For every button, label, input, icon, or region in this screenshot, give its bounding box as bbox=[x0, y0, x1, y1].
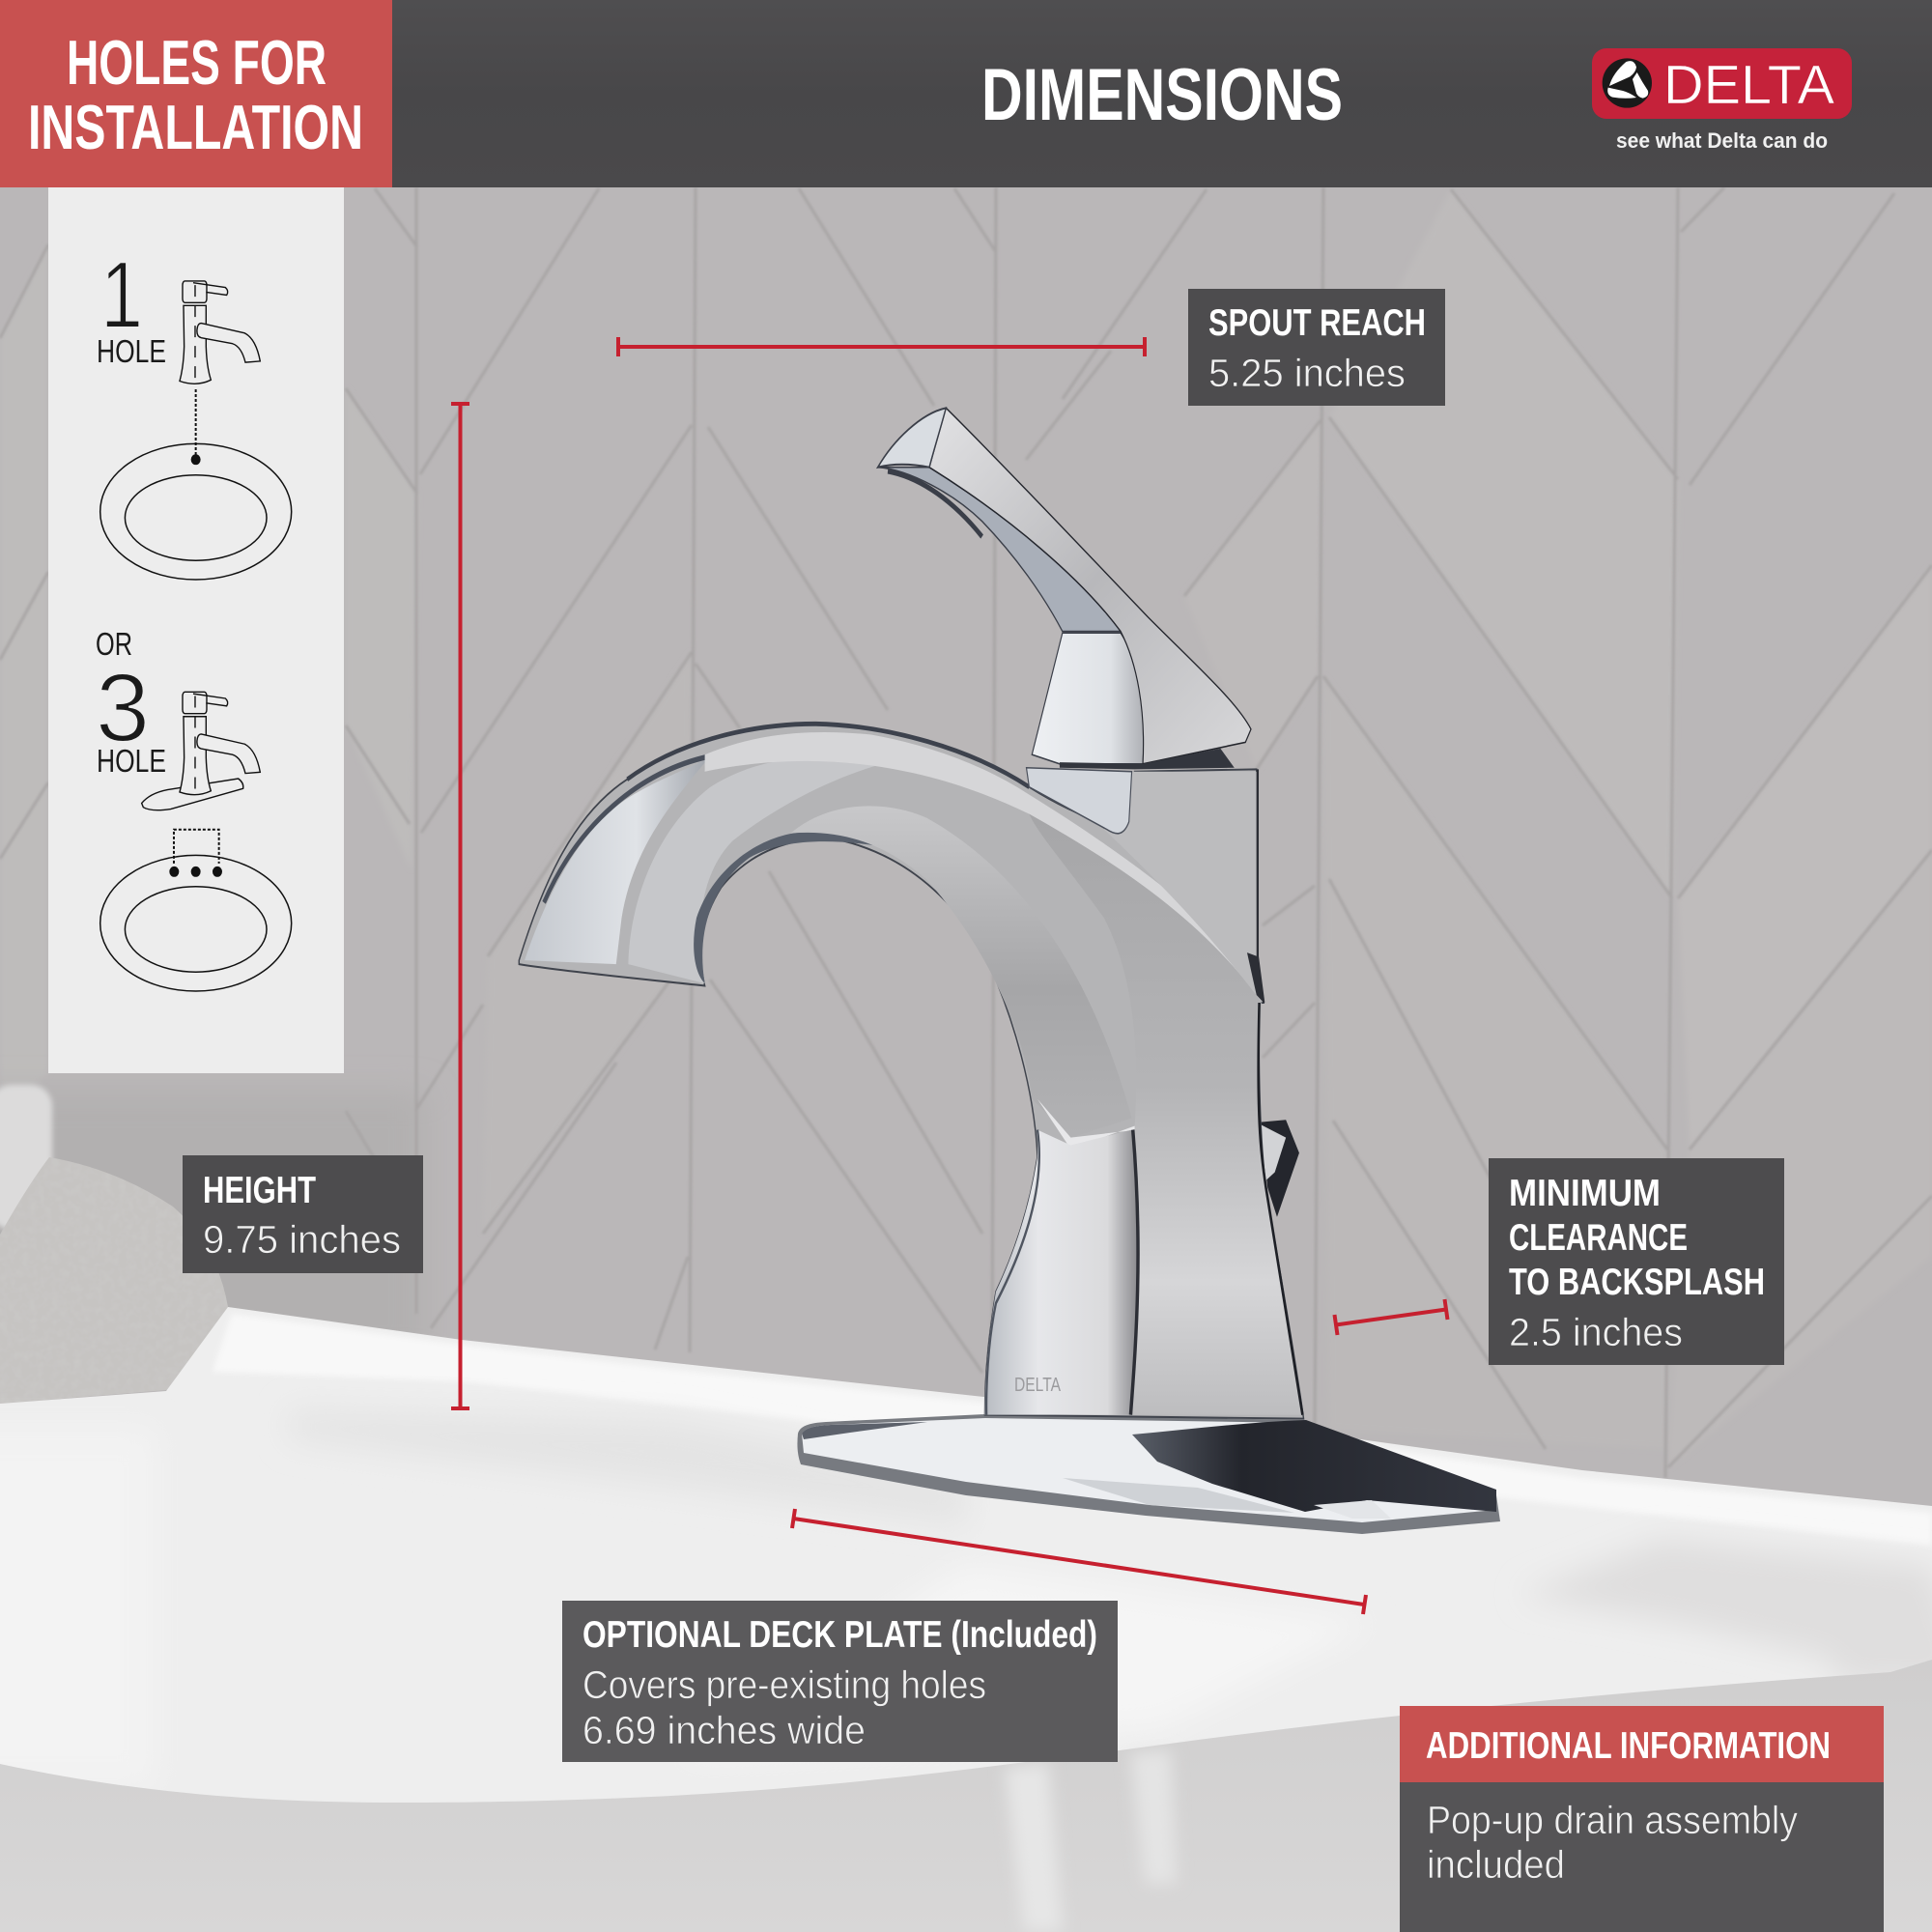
callout: additional information bbox=[1400, 1706, 1884, 1932]
icon: three hole sink bbox=[100, 855, 292, 991]
spout top highlight bbox=[705, 732, 1257, 995]
handle bbox=[878, 408, 1251, 769]
label: 1 hole bbox=[97, 242, 166, 369]
callout: additional information: ADDITIONAL INFORMATION bbox=[1426, 1725, 1831, 1767]
deck plate bbox=[797, 1414, 1500, 1534]
label: or 3 hole bbox=[96, 626, 166, 779]
callout: minimum clearance: 2.5 inches bbox=[1509, 1310, 1683, 1354]
pop-up rod bbox=[1261, 1120, 1299, 1217]
faucet bbox=[519, 408, 1500, 1534]
icon: three hole faucet with plate bbox=[142, 692, 260, 877]
callout: spout reach: SPOUT REACH bbox=[1208, 302, 1426, 344]
dimension line: deck plate bbox=[792, 1509, 1366, 1614]
background: towel and toothbrush bbox=[0, 1085, 228, 1404]
header: holes for installation bbox=[0, 0, 392, 187]
label: 1 hole: HOLE bbox=[97, 333, 166, 369]
callout: additional information: Pop-up drain assembly bbox=[1427, 1798, 1798, 1842]
callout: optional deck plate: Covers pre-existing holes bbox=[582, 1662, 986, 1707]
etched logo on faucet: DELTA bbox=[1014, 1375, 1062, 1396]
callout: minimum clearance: CLEARANCE bbox=[1509, 1217, 1688, 1259]
background: white sink bbox=[0, 1307, 1932, 1932]
background: tiled wall bbox=[0, 184, 1932, 1536]
faucet body bbox=[519, 724, 1304, 1419]
logo: Delta bbox=[1592, 48, 1852, 153]
callout: minimum clearance bbox=[1489, 1158, 1784, 1365]
dimension line: spout reach bbox=[618, 337, 1145, 356]
callout: minimum clearance: TO BACKSPLASH bbox=[1509, 1262, 1765, 1303]
collar bbox=[1027, 768, 1132, 834]
main column bbox=[1029, 814, 1302, 1415]
panel: hole options bbox=[48, 187, 344, 1073]
logo: Delta: see what Delta can do bbox=[1616, 128, 1828, 153]
dimension line: height bbox=[451, 404, 469, 1408]
callout: optional deck plate: OPTIONAL DECK PLATE (Included) bbox=[582, 1614, 1097, 1656]
callout: spout reach bbox=[1188, 289, 1445, 406]
neck shading bbox=[791, 806, 1132, 1138]
callout: height bbox=[183, 1155, 423, 1273]
callout: additional information: included bbox=[1427, 1842, 1565, 1887]
callout: optional deck plate: 6.69 inches wide bbox=[582, 1708, 866, 1752]
header title: dimensions: DIMENSIONS bbox=[981, 54, 1343, 136]
left stem bbox=[984, 1130, 1138, 1415]
callout: height: HEIGHT bbox=[203, 1170, 316, 1211]
label: or 3 hole: 3 bbox=[96, 654, 150, 762]
spout and column silhouette bbox=[519, 724, 1304, 1419]
dimension line: clearance bbox=[1335, 1299, 1447, 1335]
icon: single hole faucet bbox=[180, 281, 260, 465]
icon: Delta triangle mark bbox=[1603, 58, 1652, 108]
spout front bbox=[525, 756, 710, 964]
callout: height: 9.75 inches bbox=[203, 1217, 401, 1262]
callout: spout reach: 5.25 inches bbox=[1208, 351, 1406, 395]
header: holes for installation: HOLES FOR bbox=[67, 27, 327, 98]
icon: single hole sink bbox=[100, 443, 292, 580]
header bar bbox=[392, 0, 1932, 187]
callout: minimum clearance: MINIMUM bbox=[1509, 1173, 1661, 1214]
label: 1 hole: 1 bbox=[100, 242, 143, 348]
logo: Delta: DELTA bbox=[1663, 54, 1834, 116]
label: or 3 hole: OR bbox=[96, 626, 132, 662]
header: holes for installation: INSTALLATION bbox=[28, 92, 363, 162]
label: or 3 hole: HOLE bbox=[97, 743, 166, 779]
callout: optional deck plate bbox=[562, 1601, 1118, 1762]
